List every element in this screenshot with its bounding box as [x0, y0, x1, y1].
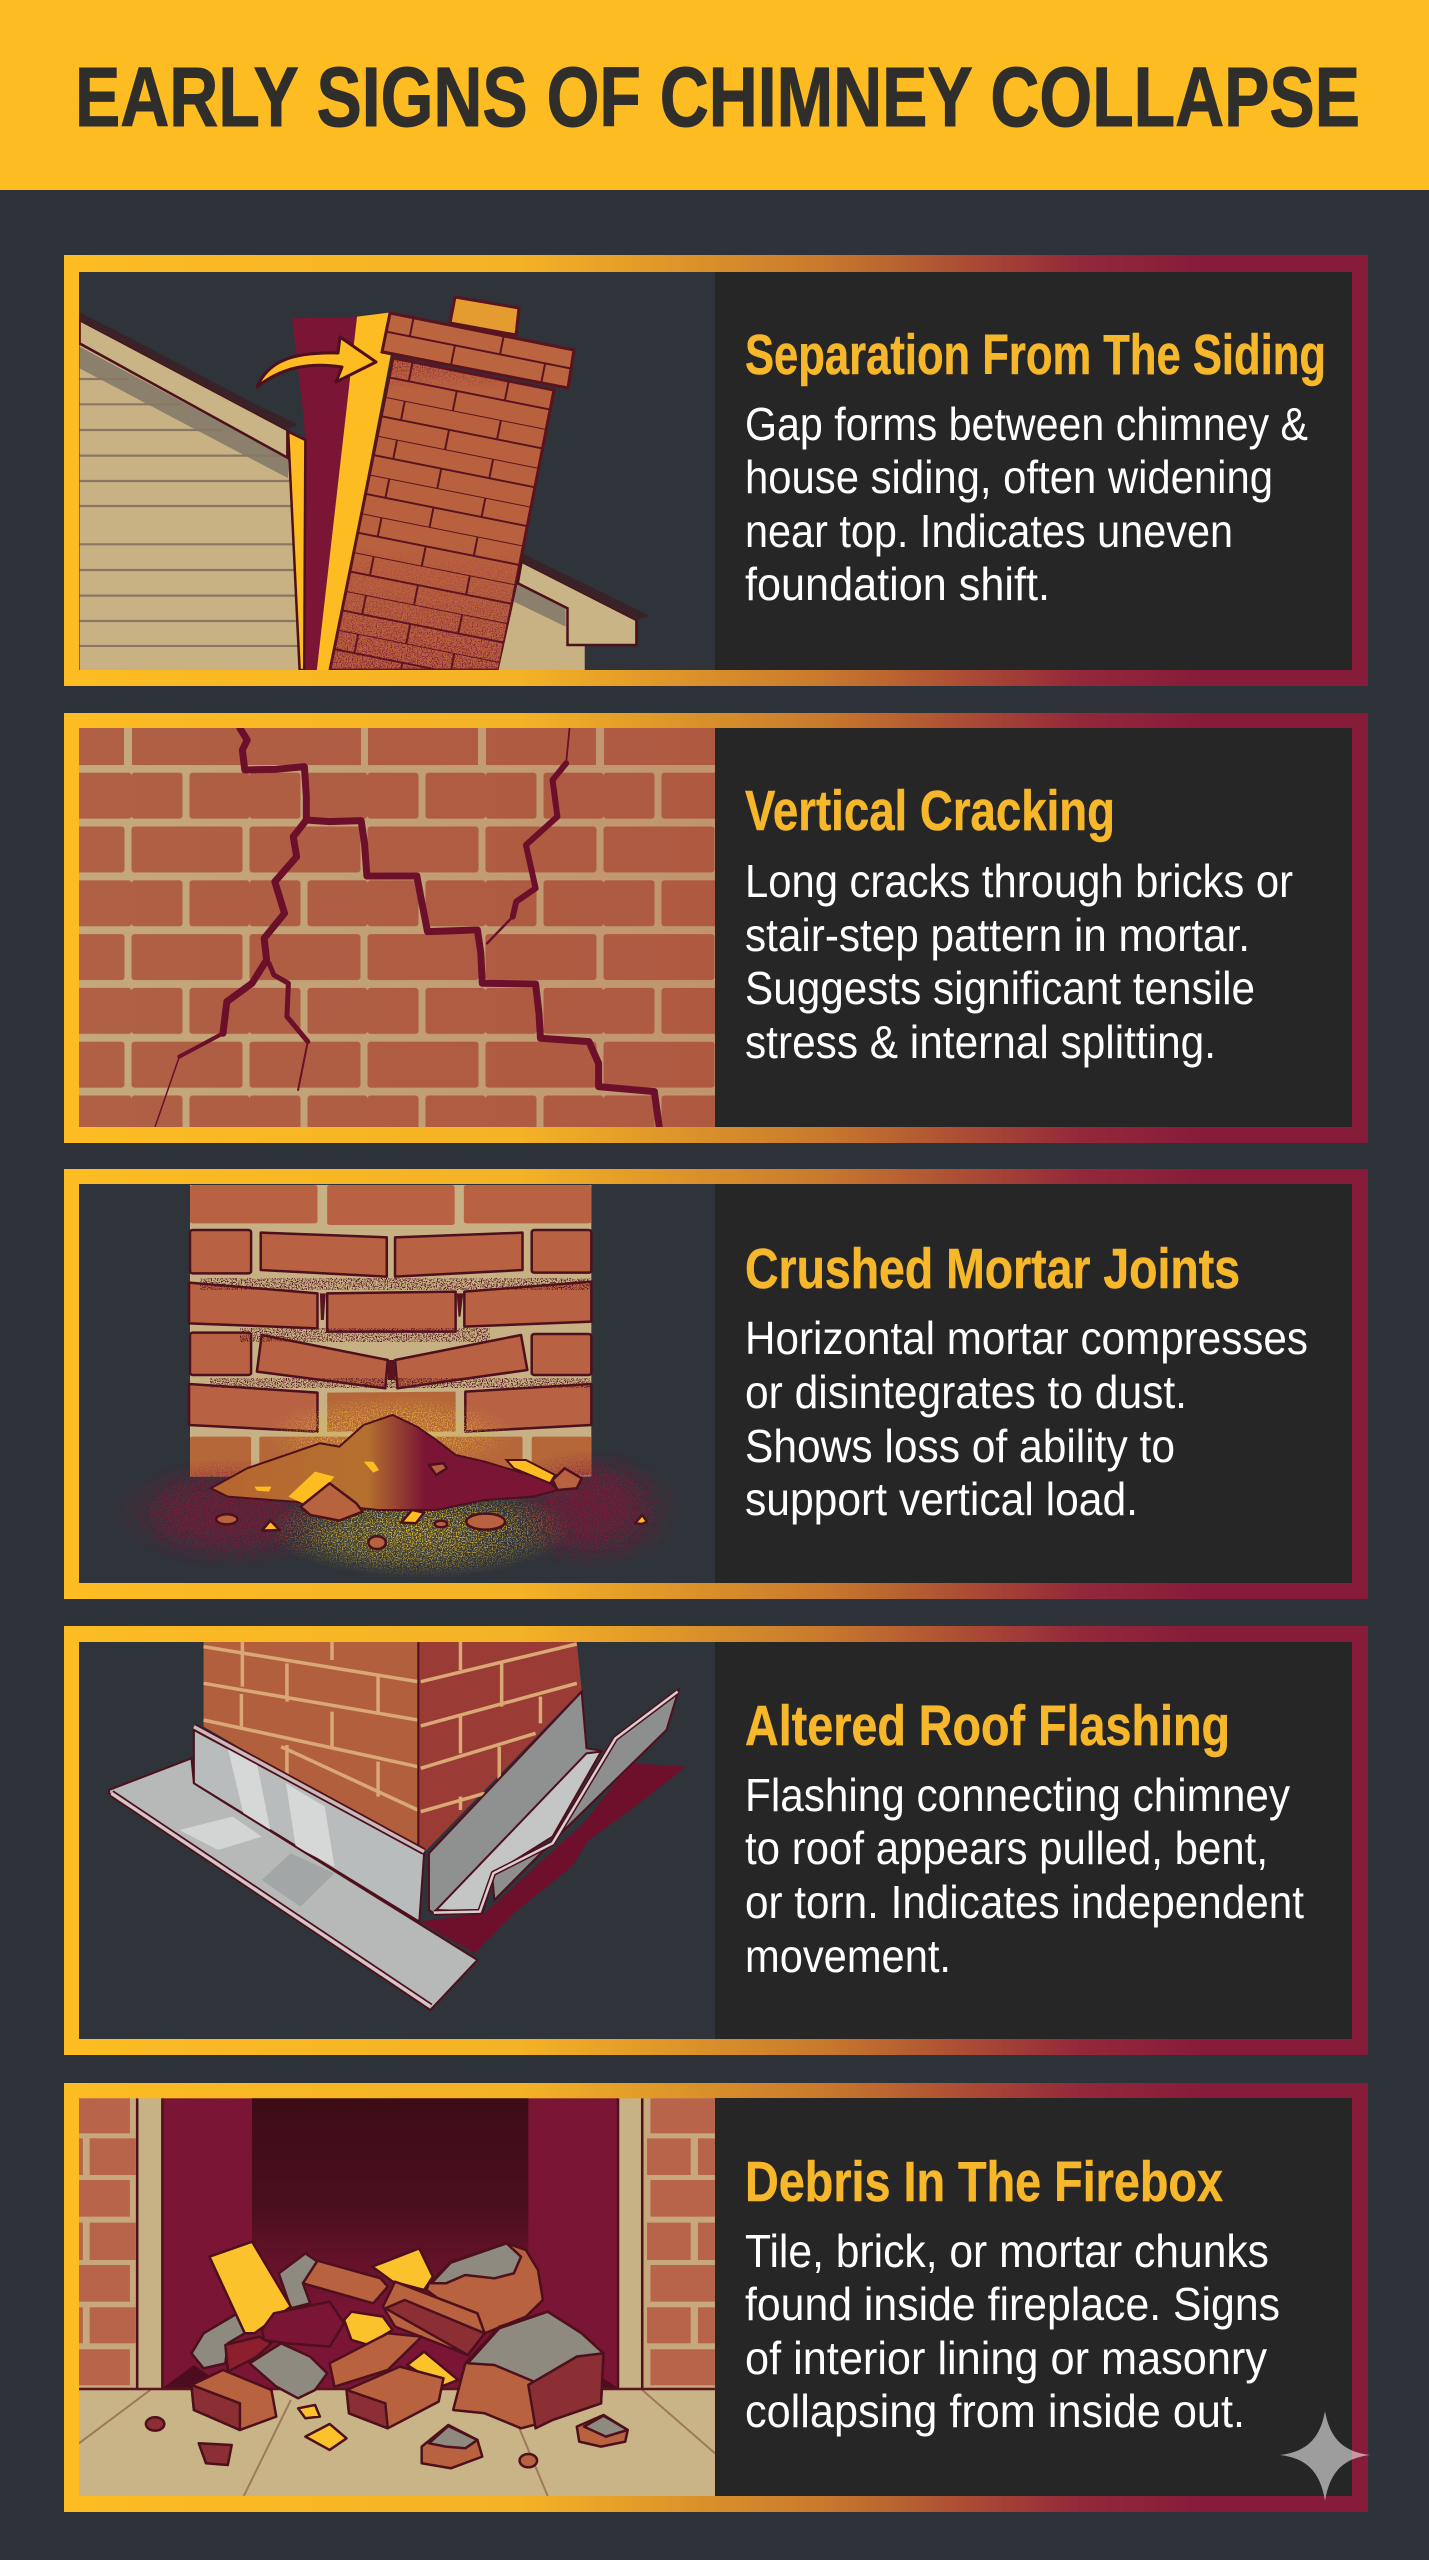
icon: sparkle watermark	[1280, 2411, 1370, 2501]
panel: altered roof flashing	[64, 1626, 1368, 2055]
pillars	[139, 2098, 162, 2388]
right flashing pieces	[429, 1692, 601, 1913]
description: Long cracks through bricks or	[745, 855, 1293, 907]
heading: Altered Roof Flashing	[745, 1694, 1230, 1758]
chimney flue	[450, 297, 519, 335]
chimney left face	[204, 1642, 418, 1850]
dust cloud	[110, 1395, 685, 1578]
hearth floor	[79, 2388, 715, 2497]
panel: vertical cracking	[64, 713, 1368, 1143]
description: collapsing from inside out.	[745, 2385, 1245, 2437]
description: stair-step pattern in mortar.	[745, 909, 1250, 961]
description: or torn. Indicates independent	[745, 1876, 1304, 1928]
heading: Debris In The Firebox	[745, 2150, 1223, 2214]
description: Shows loss of ability to	[745, 1420, 1175, 1472]
brick column	[189, 1185, 591, 1477]
firebox	[162, 2098, 618, 2388]
description	[745, 398, 1308, 610]
illustration: chimney separating from house	[80, 297, 650, 670]
description	[745, 2225, 1280, 2437]
description: near top. Indicates uneven	[745, 505, 1233, 557]
cracks	[155, 728, 659, 1127]
maroon roof underlay	[419, 1763, 686, 1953]
description: movement.	[745, 1930, 951, 1982]
chimney body	[330, 358, 554, 670]
description	[745, 1312, 1308, 1525]
illustration: crushed mortar	[110, 1185, 685, 1578]
rubble pile	[211, 1415, 647, 1549]
description: found inside fireplace. Signs	[745, 2278, 1280, 2330]
front flashing	[194, 1730, 424, 1922]
description: Horizontal mortar compresses	[745, 1312, 1308, 1364]
arrow: gap widening	[257, 337, 376, 387]
description: Tile, brick, or mortar chunks	[745, 2225, 1269, 2277]
illustration: bent flashing	[109, 1642, 686, 2010]
description: Suggests significant tensile	[745, 962, 1255, 1014]
description	[745, 1769, 1304, 1982]
description: Flashing connecting chimney	[745, 1769, 1290, 1821]
description: of interior lining or masonry	[745, 2332, 1267, 2384]
panel: debris in the firebox	[64, 2083, 1368, 2512]
description: stress & internal splitting.	[745, 1016, 1216, 1068]
heading: Vertical Cracking	[745, 779, 1115, 843]
panel: separation from the siding	[64, 255, 1368, 686]
header banner	[0, 0, 1429, 190]
heading: Crushed Mortar Joints	[745, 1237, 1240, 1301]
description: support vertical load.	[745, 1473, 1138, 1525]
crushed mortar speckle	[200, 1278, 590, 1388]
illustration: cracked brick wall	[79, 728, 715, 1127]
description	[745, 855, 1293, 1068]
description: house siding, often widening	[745, 451, 1273, 503]
illustration: fireplace rubble	[79, 2098, 715, 2497]
side brick walls	[79, 2098, 140, 2388]
chimney right face	[418, 1642, 582, 1850]
description: to roof appears pulled, bent,	[745, 1822, 1268, 1874]
base flange	[109, 1758, 477, 2010]
right lower roof	[499, 554, 650, 670]
description: Gap forms between chimney &	[745, 398, 1308, 450]
description: foundation shift.	[745, 558, 1050, 610]
rubble	[146, 2242, 628, 2468]
panel: crushed mortar joints	[64, 1169, 1368, 1599]
chimney cap	[382, 313, 574, 388]
description: or disintegrates to dust.	[745, 1366, 1187, 1418]
